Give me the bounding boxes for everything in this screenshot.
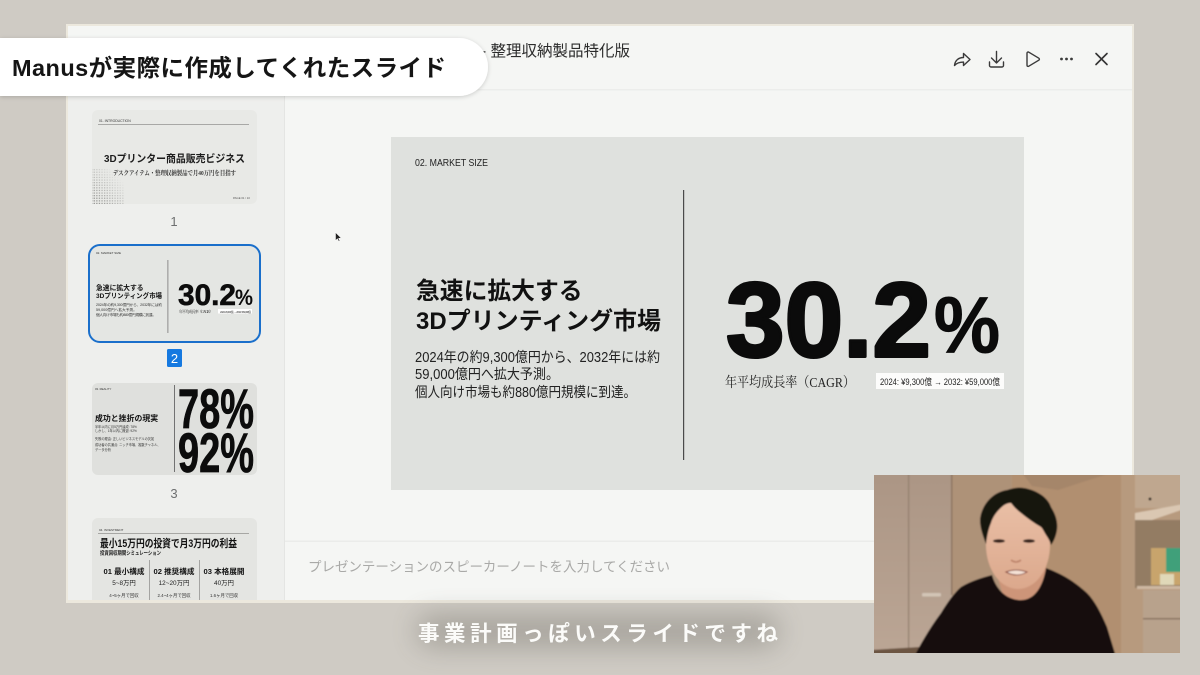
thumbnail 4: investment: 04. INVESTMENT [99, 528, 124, 532]
title banner: Manusが実際に作成してくれたスライド [12, 54, 446, 81]
thumbnail 1: introduction: PAGE 01 / 10 [233, 196, 250, 200]
thumbnail 1: introduction: デスクアイテム・整理収納製品で月40万円を目指す [113, 168, 237, 177]
slide body text: 個人向け市場も約880億円規模に到達。 [415, 384, 636, 401]
thumbnail 3: reality: 半年以内に月5万円達成: 78% [95, 424, 137, 429]
shelf unit [1121, 475, 1180, 653]
slide body text [415, 349, 660, 401]
thumbnail 2: market size (selected): 急速に拡大する [96, 283, 144, 292]
drawers [1137, 586, 1184, 589]
thumbnail 3: reality: 成功者の共通点: ニッチ市場、複数チャネル、 [95, 442, 160, 447]
thumbnail 2: market size (selected): 30.2 [178, 279, 236, 312]
icon: play [1027, 52, 1039, 66]
thumbnail 1: introduction: 01. INTRODUCTION [99, 119, 131, 123]
stat caption: 年平均成長率（CAGR） [725, 374, 855, 391]
thumbnail 4: investment: 03 本格展開 [204, 566, 245, 576]
slide body text: 59,000億円へ拡大予測。 [415, 366, 559, 383]
subtitle caption: 事業計画っぽいスライドですね [418, 622, 778, 646]
nose and mouth [1006, 560, 1027, 575]
thumbnail 3: reality: 成功と挫折の現実 [95, 413, 158, 423]
speaker notes area: プレゼンテーションのスピーカーノートを入力してください [308, 560, 670, 574]
thumbnail 2: market size (selected): % [235, 285, 253, 310]
big stat: 30.2%: % [934, 280, 1000, 370]
thumbnail number 2 badge [167, 349, 182, 367]
slide heading: 3Dプリンティング市場 [416, 307, 661, 335]
neck [998, 568, 1046, 602]
thumbnail 4: investment [92, 518, 257, 600]
thumbnail 4: investment: 12~20万円 [159, 579, 189, 587]
thumbnail 1: introduction: 3Dプリンター商品販売ビジネス [104, 152, 245, 165]
main slide: market size [391, 137, 1024, 490]
stat detail tag [876, 373, 1004, 389]
icon: download [990, 52, 1004, 67]
title banner [0, 38, 488, 96]
stat detail tag: 2024: ¥9,300億 → 2032: ¥59,000億 [880, 376, 1000, 387]
eyes [993, 539, 1035, 543]
thumbnail 4: investment: 01 最小構成 [104, 566, 145, 576]
thumbnail 4: investment: 1.6ヶ月で回収 [210, 593, 239, 599]
face [986, 501, 1050, 589]
thumbnail 2: market size (selected): 2024年の約9,300億円から、2032年には約 [96, 302, 162, 307]
wardrobe doors [870, 470, 952, 658]
hair [980, 488, 1057, 545]
thumbnail 4: investment: 5~8万円 [112, 579, 136, 587]
document title: - 整理収納製品特化版 [481, 42, 630, 60]
thumbnail 4: investment: 最小15万円の投資で月3万円の利益 [100, 537, 237, 550]
header divider [68, 89, 1132, 90]
thumbnail 1: introduction [92, 120, 250, 204]
icon: mouse cursor [336, 232, 341, 242]
thumbnail 3: reality: 92% [178, 421, 254, 484]
thumbnail 3: reality: 78% [178, 377, 254, 440]
webcam: presenter [870, 470, 1184, 660]
icon: share [954, 54, 970, 66]
thumbnail 4: investment: 投資回収期間シミュレーション [100, 549, 161, 557]
slide heading: 急速に拡大する [416, 278, 583, 305]
sweater [912, 568, 1117, 660]
thumbnail 2: market size (selected): 2024: ¥9,300億 → 2032: ¥59,000億 [220, 310, 251, 314]
thumbnail 4: investment: 4~5ヶ月で回収 [109, 593, 139, 599]
big stat: 30.2%: 30.2 [726, 262, 931, 380]
colorful poster [1151, 548, 1181, 585]
vertical divider [683, 190, 684, 460]
thumbnail number 3: 3 [170, 486, 178, 501]
thumbnail 2: market size (selected) [89, 245, 260, 342]
thumbnail 2: market size (selected): 02. MARKET SIZE [96, 251, 121, 255]
ceiling beam [1024, 475, 1102, 490]
icon: close [1096, 54, 1107, 64]
thumbnail 3: reality: 03. REALITY [95, 387, 111, 391]
thumbnail 3: reality [92, 377, 257, 484]
thumbnail 3: reality: しかし、1年以内に撤退: 92% [95, 428, 137, 433]
thumbnail 2: market size (selected): 3Dプリンティング市場 [96, 291, 162, 300]
thumbnail 4: investment: 02 推奨構成 [154, 566, 195, 576]
thumbnail sidebar [88, 96, 285, 600]
room wall [1011, 475, 1122, 653]
thumbnail 2: market size (selected): 59,000億円へ拡大予測。 [96, 307, 137, 312]
presentation viewer window [66, 24, 1134, 612]
thumbnail number 2 badge: 2 [171, 351, 178, 366]
thumbnail 3: reality: データ分析 [95, 447, 112, 452]
slide heading [416, 278, 661, 335]
icon: more [1060, 58, 1073, 60]
section label: 02. MARKET SIZE [415, 158, 488, 169]
slide body text: 2024年の約9,300億円から、2032年には約 [415, 349, 660, 366]
thumbnail 4: investment: 40万円 [214, 579, 234, 587]
thumbnail 2: market size (selected): 年平均成長率（CAGR） [179, 309, 213, 314]
thumbnail 3: reality: 失敗の理由: 正しいビジネスモデルの欠如 [95, 436, 154, 441]
thumbnail 2: market size (selected): 個人向け市場も約880億円規模に到達。 [96, 312, 156, 317]
thumbnail number 1: 1 [170, 214, 178, 229]
thumbnail 4: investment: 2.4~4ヶ月で回収 [157, 593, 191, 599]
